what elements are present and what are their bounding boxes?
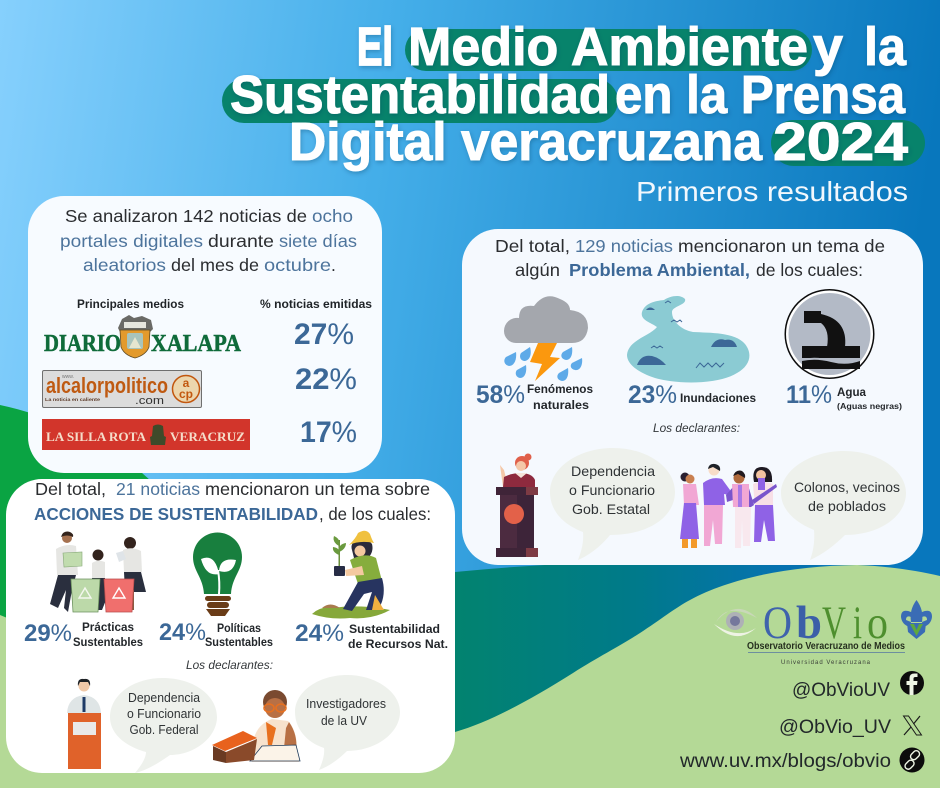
intro text: . xyxy=(331,255,336,275)
icon: tormenta xyxy=(504,296,588,381)
stat: 24% politicas sustentables: Políticas xyxy=(217,621,261,635)
logo: Diario de Xalapa: XALAPA xyxy=(151,331,242,357)
title text: y xyxy=(813,17,843,77)
panel: problema ambiental xyxy=(462,229,923,565)
stat: 29% practicas sustentables: Prácticas xyxy=(82,620,134,634)
stat: 24% sustentabilidad de recursos: Sustentabilidad xyxy=(349,622,440,636)
title text: Sustentabilidad xyxy=(230,65,610,125)
logo: alcalorpolitico: www. xyxy=(62,374,74,380)
stat: 22%: 22% xyxy=(295,363,357,396)
stat: 23% inundaciones: 23% xyxy=(628,381,677,409)
icon: funcionaria en podio xyxy=(496,454,538,557)
stat: 23% inundaciones xyxy=(628,381,756,409)
intro text: durante xyxy=(208,231,274,251)
logo: alcalorpolitico xyxy=(42,370,202,408)
panel heading: mencionaron un tema sobre xyxy=(205,479,430,499)
icon: grupo de vecinos xyxy=(680,464,777,548)
stat: 24% politicas sustentables: Sustentables xyxy=(205,635,273,649)
column heading: porcentaje: % noticias emitidas xyxy=(260,299,372,311)
panel heading: 129 noticias xyxy=(575,236,673,256)
panel heading: mencionaron un tema de xyxy=(678,236,885,256)
man xyxy=(50,532,82,612)
social: facebook xyxy=(792,671,924,701)
person 2 xyxy=(703,464,730,546)
declarantes label: Los declarantes: xyxy=(186,660,273,672)
title text: Digital veracruzana xyxy=(289,112,763,172)
logo: ObVio: O xyxy=(763,597,792,649)
speech bubble: gobierno federal: Dependencia xyxy=(128,690,201,705)
declarantes label: Los declarantes: xyxy=(653,423,740,435)
social: web: www.uv.mx/blogs/obvio xyxy=(679,751,891,772)
icon: aguas negras xyxy=(784,289,874,379)
intro text: ocho xyxy=(312,206,353,226)
stat: 24% sustentabilidad de recursos: 24% xyxy=(295,620,344,647)
panel heading: ACCIONES DE SUSTENTABILIDAD xyxy=(34,504,318,524)
stat: 27%: 27% xyxy=(294,318,354,351)
person 3 xyxy=(726,471,754,548)
stat: 17%: 17% xyxy=(300,416,357,449)
stat: 24% sustentabilidad de recursos: de Recursos Nat. xyxy=(348,637,448,651)
person 1 xyxy=(680,472,699,548)
panel heading: Problema Ambiental, xyxy=(569,260,750,280)
intro text: octubre xyxy=(264,255,331,275)
stat: 58% fenomenos naturales: naturales xyxy=(533,398,589,412)
stat: 11% agua: (Aguas negras) xyxy=(837,401,902,411)
stat: 24% politicas sustentables xyxy=(159,619,273,649)
speech bubble: investigadores: Investigadores xyxy=(306,696,386,711)
icon: foco con planta xyxy=(193,532,242,616)
stat: 29% practicas sustentables: 29% xyxy=(24,620,72,647)
panel heading xyxy=(495,236,885,280)
icon: persona con planta xyxy=(312,531,390,618)
speech bubble: gobierno estatal: Dependencia xyxy=(571,463,655,479)
logo: ObVio: o xyxy=(867,597,888,649)
speech bubble: gobierno federal xyxy=(110,678,217,773)
speech bubble: gobierno estatal: o Funcionario xyxy=(569,482,655,498)
logo: La Silla Rota Veracruz xyxy=(42,419,250,450)
icon: funcionario en podio xyxy=(67,679,101,769)
stat: 24% sustentabilidad de recursos xyxy=(295,620,448,651)
intro text: del mes de xyxy=(171,255,259,275)
speech bubble: investigadores: de la UV xyxy=(321,713,367,728)
intro text: Se analizaron 142 noticias de xyxy=(65,206,307,226)
girl xyxy=(92,550,106,610)
icon: personas reciclando xyxy=(50,532,146,612)
logo: La Silla Rota Veracruz: LA SILLA ROTA xyxy=(46,429,147,444)
logo: La Silla Rota Veracruz: VERACRUZ xyxy=(170,429,245,444)
logo: alcalorpolitico: alcalorpolitico xyxy=(46,373,168,398)
stat: 11% agua: Agua xyxy=(837,385,866,399)
panel heading: 21 noticias xyxy=(116,479,200,499)
column heading: principales medios: Principales medios xyxy=(77,299,184,311)
title text: Medio Ambiente xyxy=(408,17,808,77)
stat: 11% agua: 11% xyxy=(786,381,832,409)
icon: investigador con libros xyxy=(212,690,300,763)
logo: ObVio: V xyxy=(822,597,846,649)
title text xyxy=(230,17,908,172)
panel heading: Del total, xyxy=(495,236,570,256)
green bin xyxy=(71,579,100,612)
logo: ObVio: i xyxy=(853,597,862,649)
woman xyxy=(116,537,146,610)
logo: ObVio xyxy=(714,597,932,666)
stat: 29% practicas sustentables xyxy=(24,620,143,649)
intro text xyxy=(60,206,357,275)
logo: Diario de Xalapa: DIARIO xyxy=(44,331,121,357)
logo: alcalorpolitico: cp xyxy=(179,387,193,401)
icon: flor de liz xyxy=(901,600,932,639)
stat: 23% inundaciones: Inundaciones xyxy=(680,391,756,405)
title text: El xyxy=(357,17,393,77)
speech bubble: colonos: Colonos, vecinos xyxy=(794,479,900,495)
speech bubble: gobierno estatal xyxy=(550,448,675,560)
speech bubble: gobierno federal: o Funcionario xyxy=(127,706,201,721)
icon: inundaciones xyxy=(627,296,749,382)
logo: alcalorpolitico: La noticia en caliente xyxy=(45,397,101,402)
person 4 xyxy=(752,467,777,542)
logo: ObVio: b xyxy=(796,597,822,649)
speech bubble: colonos xyxy=(781,451,906,560)
panel heading: Del total, xyxy=(35,479,106,499)
icon: ojo xyxy=(714,609,757,636)
intro text: portales digitales xyxy=(60,231,203,251)
logo: ObVio: Observatorio Veracruzano de Medios xyxy=(747,641,906,652)
intro text: aleatorios xyxy=(83,255,166,275)
stat: 58% fenomenos naturales xyxy=(476,381,593,412)
logo: alcalorpolitico: a xyxy=(183,376,190,390)
panel heading: algún xyxy=(515,260,560,280)
title text: en la Prensa xyxy=(615,65,906,125)
logo: alcalorpolitico: .com xyxy=(135,395,164,407)
panel heading xyxy=(34,479,431,524)
speech bubble: gobierno federal: Gob. Federal xyxy=(130,722,199,737)
stat: 29% practicas sustentables: Sustentables xyxy=(73,635,143,649)
stat: 24% politicas sustentables: 24% xyxy=(159,619,206,646)
title xyxy=(222,17,925,172)
intro text: siete días xyxy=(279,231,357,251)
social: X: @ObVio_UV xyxy=(779,717,891,738)
stat: 58% fenomenos naturales: Fenómenos xyxy=(527,382,593,396)
logo: ObVio: Universidad Veracruzana xyxy=(781,660,871,666)
subtitle: Primeros resultados xyxy=(636,176,908,207)
panel: medios xyxy=(28,196,382,473)
speech bubble: colonos: de poblados xyxy=(808,498,886,514)
panel heading: , de los cuales: xyxy=(319,504,431,524)
speech bubble: investigadores xyxy=(295,675,400,770)
title highlight pills xyxy=(222,29,925,166)
stat: 11% agua xyxy=(786,381,902,411)
title text: 2024 xyxy=(773,112,908,172)
social: facebook: @ObVioUV xyxy=(792,680,890,701)
panel: acciones de sustentabilidad xyxy=(6,479,455,773)
title text: la xyxy=(864,17,907,77)
stat: 58% fenomenos naturales: 58% xyxy=(476,381,525,409)
panel heading: de los cuales: xyxy=(756,260,863,280)
social: web xyxy=(679,748,924,772)
red bin xyxy=(104,579,134,612)
speech bubble: gobierno estatal: Gob. Estatal xyxy=(572,501,650,517)
logo: Diario de Xalapa xyxy=(44,315,242,358)
